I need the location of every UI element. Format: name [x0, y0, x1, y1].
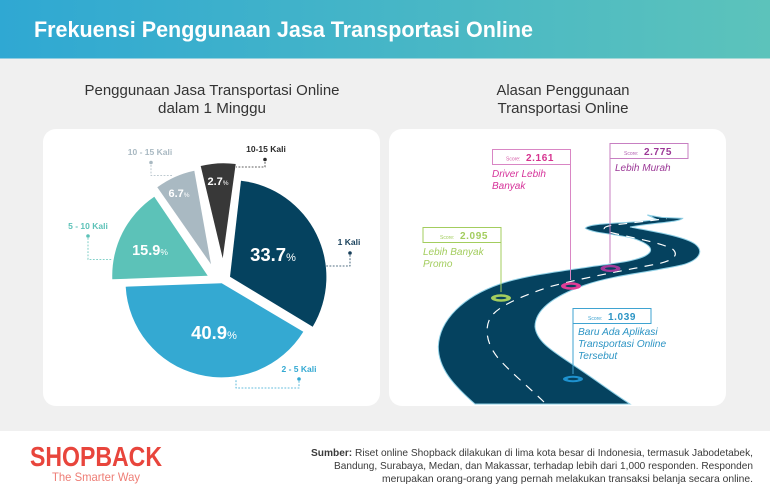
panel: road	[389, 129, 726, 406]
marker: Driver Lebih Banyak: Banyak	[492, 181, 526, 192]
slice: 2 - 5 Kali	[126, 283, 303, 377]
logo: SHOPBACK	[30, 441, 162, 472]
slice: 10 - 15 Kali grey: 6.7%	[168, 188, 190, 200]
marker: Lebih Murah: 2.775	[644, 147, 672, 158]
heading: weekly usage: Penggunaan Jasa Transportasi Online	[84, 83, 340, 99]
callout: 10-15 Kali dark: 10-15 Kali	[246, 144, 286, 154]
slice: 10-15 Kali dark	[201, 163, 236, 258]
marker: Lebih Banyak Promo: Promo	[423, 259, 453, 270]
source note: Sumber: Riset online Shopback dilakukan di lima kota besar di Indonesia, termasuk Jabodetabek,	[311, 447, 753, 459]
logo	[30, 441, 162, 484]
marker: Baru Ada Aplikasi: Tersebut	[578, 351, 618, 362]
callout: 2 - 5 Kali	[236, 364, 316, 388]
slice: 2 - 5 Kali: 40.9%	[191, 322, 237, 343]
road illustration	[438, 215, 700, 404]
heading: weekly usage	[84, 83, 340, 117]
heading: reasons: Alasan Penggunaan	[496, 83, 630, 99]
heading: reasons	[496, 83, 630, 117]
marker: Baru Ada Aplikasi: Transportasi Online	[578, 339, 666, 350]
panel: pie chart	[43, 129, 380, 406]
marker: Lebih Banyak Promo: 2.095	[460, 231, 488, 242]
callout: 5 - 10 Kali: 5 - 10 Kali	[68, 221, 108, 231]
marker: Driver Lebih Banyak	[492, 149, 581, 290]
callout: 1 Kali: 1 Kali	[338, 237, 360, 247]
slice: 5 - 10 Kali	[112, 197, 208, 279]
slice: 1 Kali: 33.7%	[250, 244, 296, 265]
marker: Lebih Banyak Promo: Score:	[440, 235, 454, 241]
marker: Baru Ada Aplikasi: 1.039	[608, 312, 636, 323]
marker: Lebih Murah: Score:	[624, 151, 638, 157]
heading: reasons: Transportasi Online	[498, 101, 628, 117]
marker: Lebih Murah: Lebih Murah	[615, 163, 671, 174]
callout: 2 - 5 Kali: 2 - 5 Kali	[282, 364, 316, 374]
callout: 10 - 15 Kali grey: 10 - 15 Kali	[128, 147, 172, 157]
source note	[311, 447, 753, 485]
marker: Lebih Banyak Promo: Lebih Banyak	[423, 247, 485, 258]
footer	[0, 431, 770, 496]
callout: 10 - 15 Kali grey	[128, 147, 172, 176]
slice: 1 Kali	[230, 181, 326, 327]
callout: 1 Kali	[326, 237, 360, 266]
marker: Lebih Murah	[600, 144, 688, 272]
marker: Driver Lebih Banyak: Driver Lebih	[492, 169, 546, 180]
slice: 5 - 10 Kali: 15.9%	[132, 243, 168, 259]
header banner	[0, 0, 770, 58]
source note: merupakan orang-orang yang pernah melakukan transaksi belanja secara online.	[382, 473, 753, 485]
marker: Baru Ada Aplikasi: Score:	[588, 316, 602, 322]
logo: The Smarter Way	[52, 470, 140, 484]
heading: weekly usage: dalam 1 Minggu	[158, 101, 266, 117]
source note: Bandung, Surabaya, Medan, dan Makassar, terhadap lebih dari 1,000 responden. Responden	[334, 460, 753, 472]
title: Frekuensi Penggunaan Jasa Transportasi Online	[34, 17, 533, 42]
marker: Baru Ada Aplikasi: Baru Ada Aplikasi	[578, 327, 658, 338]
marker: Baru Ada Aplikasi	[563, 308, 666, 382]
slice: 10-15 Kali dark: 2.7%	[207, 176, 229, 188]
marker: Driver Lebih Banyak: 2.161	[526, 153, 554, 164]
callout: 5 - 10 Kali	[68, 221, 112, 260]
slice: 10 - 15 Kali grey	[157, 171, 211, 264]
callout: 10-15 Kali dark	[236, 144, 286, 167]
marker: Driver Lebih Banyak: Score:	[506, 156, 520, 162]
marker: Lebih Banyak Promo	[423, 228, 511, 302]
